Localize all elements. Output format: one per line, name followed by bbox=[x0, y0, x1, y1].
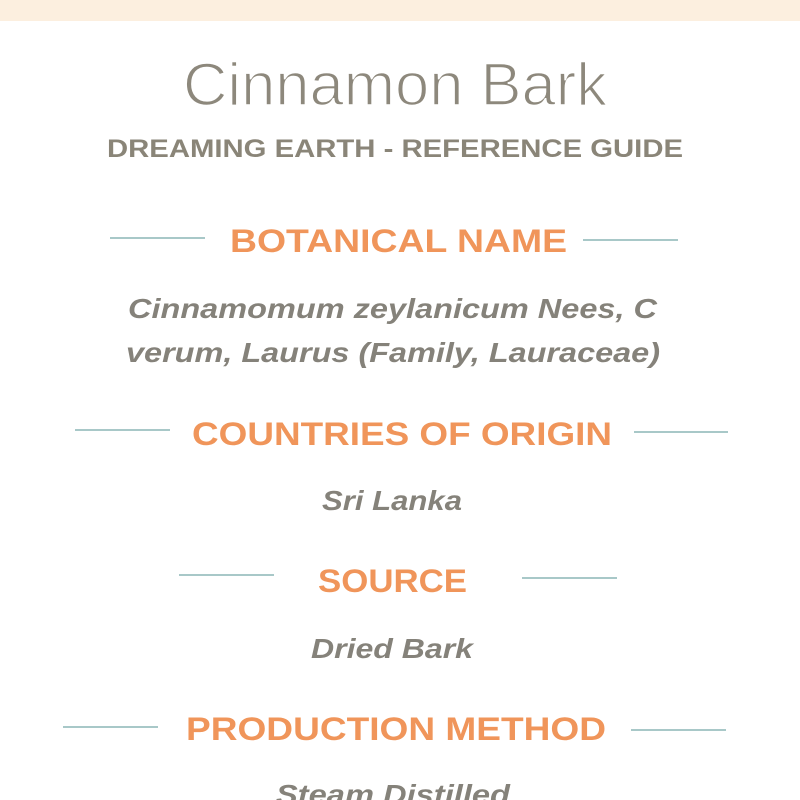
section: countries of origin: Sri Lanka bbox=[322, 485, 462, 516]
section: source: Dried Bark bbox=[311, 633, 475, 664]
section: botanical name bbox=[110, 223, 678, 368]
title: Cinnamon Bark bbox=[183, 51, 608, 118]
section: countries of origin: COUNTRIES OF ORIGIN bbox=[192, 416, 612, 452]
section: botanical name: verum, Laurus (Family, Lauraceae) bbox=[126, 337, 660, 368]
section: production method: PRODUCTION METHOD bbox=[186, 711, 606, 747]
section: countries of origin bbox=[75, 416, 728, 516]
section: production method bbox=[63, 711, 726, 800]
section: source bbox=[179, 563, 617, 664]
subtitle: DREAMING EARTH - REFERENCE GUIDE bbox=[107, 135, 683, 163]
top band bbox=[0, 0, 800, 21]
section: source: SOURCE bbox=[318, 563, 467, 599]
section: botanical name: Cinnamomum zeylanicum Nees, C bbox=[128, 293, 658, 324]
section: botanical name: BOTANICAL NAME bbox=[230, 223, 567, 259]
